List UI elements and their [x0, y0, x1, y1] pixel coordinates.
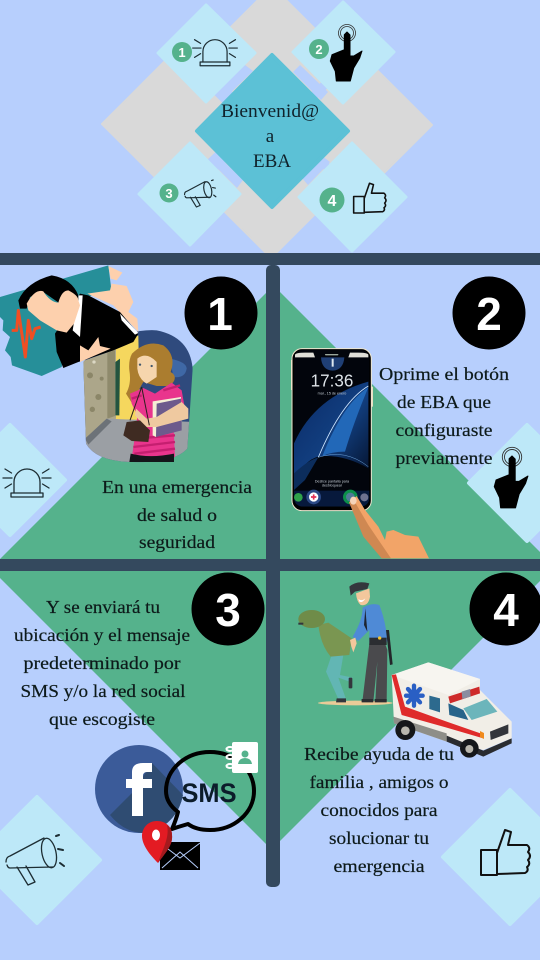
- panel: header diamonds: [102, 0, 432, 258]
- text: step 1: En una emergencia: [102, 477, 252, 497]
- text: step 2: [379, 364, 509, 468]
- number badge 4: 4: [493, 584, 519, 636]
- illustration: phone with finger: desbloquear: [322, 484, 343, 488]
- step badge 2 with pointer icon: [309, 24, 362, 81]
- illustration: ambulance: [392, 662, 512, 758]
- panel: panel backgrounds green: [0, 292, 540, 844]
- icon: SMS bubble: [166, 752, 254, 830]
- text: step 3: [14, 597, 190, 729]
- text: step 1: seguridad: [139, 532, 215, 552]
- center diamond: [197, 55, 348, 207]
- text: step 4: solucionar tu: [329, 828, 429, 848]
- step badge 4 with thumb icon: [320, 183, 386, 213]
- text: step 4: [304, 744, 454, 876]
- text: step 3: predeterminado por: [24, 653, 180, 673]
- illustration: phone with finger: mar., 15 de enero: [318, 391, 346, 395]
- text: step 2: Oprime el botón: [379, 364, 509, 384]
- text: step 1: de salud o: [137, 505, 217, 525]
- sub: detained person: [298, 610, 353, 702]
- sub: police officer: [349, 582, 393, 702]
- number badge 3: [192, 572, 264, 646]
- step badge 2 with pointer icon: 2: [315, 42, 323, 57]
- illustration: phone with finger: 17:36: [311, 370, 353, 390]
- icon: side diamond pointer: [469, 425, 540, 541]
- icon: side diamond megaphone: [0, 797, 100, 923]
- illustration: phone with finger: Deslice pantalla para: [315, 479, 350, 483]
- text: step 1: [102, 477, 252, 552]
- title: EBA: [253, 151, 291, 172]
- number badge 2: 2: [476, 288, 502, 340]
- number badge 3: 3: [215, 584, 241, 636]
- text: step 4: Recibe ayuda de tu: [304, 744, 454, 764]
- sub: girl hair: [126, 344, 175, 403]
- icon: location pin: [142, 821, 172, 863]
- number badge 1: 1: [207, 288, 233, 340]
- title: a: [266, 126, 275, 147]
- icon: envelope: [160, 842, 200, 870]
- number badge 4: [470, 572, 540, 646]
- text: step 2: previamente: [396, 448, 492, 468]
- illustration: phone with finger: [291, 349, 429, 558]
- text: step 4: emergencia: [334, 856, 425, 876]
- step badge 4 with thumb icon: 4: [328, 193, 337, 210]
- illustration: person with heart attack: [0, 265, 138, 376]
- step badge 1 with alarm icon: [172, 40, 237, 66]
- icon: side diamond alarm: [0, 425, 65, 535]
- text: step 2: de EBA que: [397, 392, 491, 412]
- icon: SMS bubble: SMS: [182, 778, 236, 808]
- text: step 4: conocidos para: [320, 800, 438, 820]
- step badge 1 with alarm icon: 1: [178, 45, 186, 60]
- text: step 3: Y se enviará tu: [46, 597, 160, 617]
- icon: facebook circle: [95, 745, 183, 833]
- text: step 3: ubicación y el mensaje: [14, 625, 190, 645]
- step badge 3 with megaphone icon: [160, 180, 216, 207]
- step badge 3 with megaphone icon: 3: [165, 186, 173, 201]
- illustration: girl scared in alley: [80, 327, 197, 465]
- illustration: police arrest: [298, 582, 393, 705]
- dividers: [0, 253, 540, 887]
- text: step 4: familia , amigos o: [310, 772, 448, 792]
- number badge 1: [184, 276, 258, 350]
- text: step 2: configuraste: [396, 420, 493, 440]
- text: step 3: SMS y/o la red social: [20, 681, 186, 701]
- title: Bienvenid@: [221, 101, 319, 122]
- title: [221, 101, 319, 172]
- text: step 3: que escogiste: [49, 709, 155, 729]
- number badge 2: [452, 276, 526, 350]
- icon: side diamond thumb: [443, 790, 540, 924]
- icon: contacts: [226, 742, 258, 773]
